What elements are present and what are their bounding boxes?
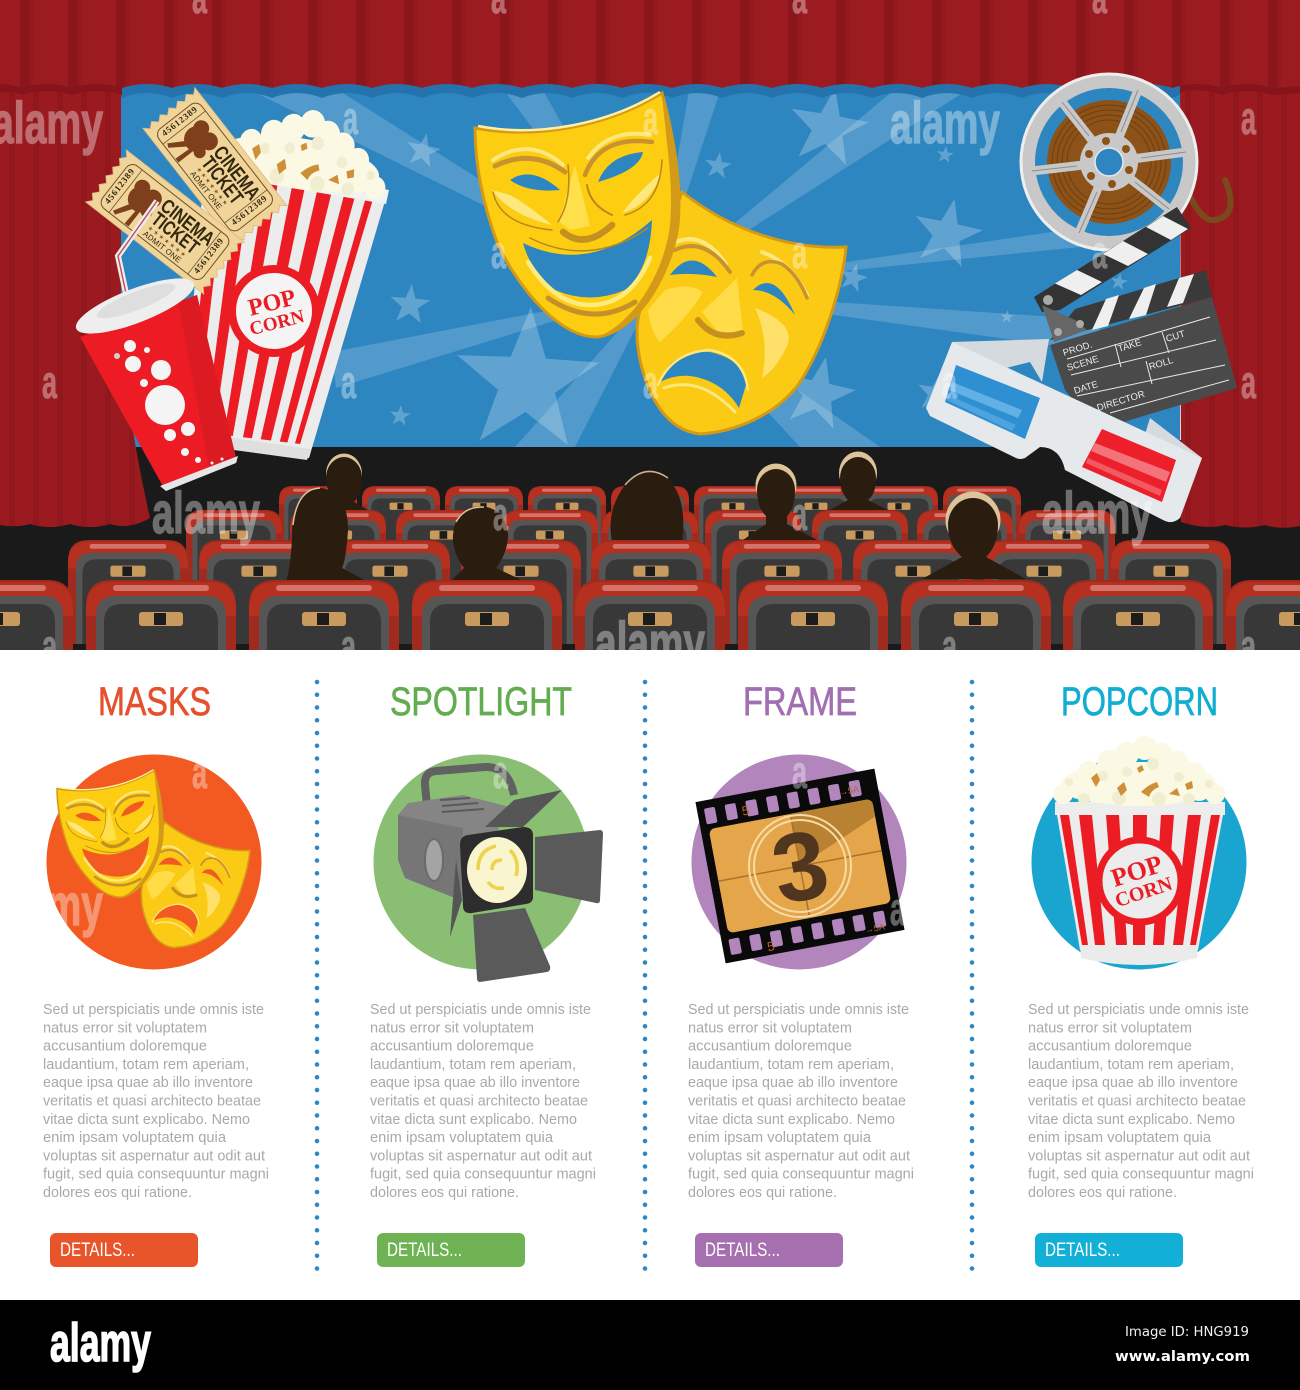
watermarks: a	[491, 226, 506, 278]
text block: popcorn	[1028, 1002, 1254, 1201]
cinema ticket (front): CINEMA	[156, 195, 218, 251]
film clapperboard: SCENE	[1066, 354, 1100, 374]
icon: film frame on purple circle: →5A	[838, 784, 860, 797]
watermarks: a	[942, 356, 957, 408]
text block: spotlight: voluptas sit aspernatur aut odit aut	[370, 1148, 592, 1164]
front row viewers	[286, 488, 1026, 582]
text block: frame: natus error sit voluptatem	[688, 1020, 852, 1036]
3D glasses	[926, 342, 1202, 522]
icon: film frame on purple circle: →5A	[864, 922, 886, 935]
left side curtain	[0, 85, 150, 527]
cinema ticket (front): TICKET	[147, 208, 203, 259]
icon: masks on orange circle	[46, 754, 262, 970]
text block: masks: natus error sit voluptatem	[43, 1020, 207, 1036]
watermarks: a	[42, 620, 57, 672]
film clapperboard: DATE	[1073, 379, 1099, 397]
text block: frame: fugit, sed quia consequuntur magni	[688, 1167, 914, 1183]
website: www.alamy.com	[1115, 1349, 1250, 1365]
text block: masks: veritatis et quasi architecto beatae	[43, 1094, 261, 1110]
top valance curtain	[0, 0, 1300, 88]
soda cup with straw	[70, 201, 238, 491]
film tail	[1170, 180, 1231, 220]
cinema ticket (back): CINEMA	[209, 142, 264, 204]
button: popcorn details: DETAILS...	[1045, 1240, 1120, 1261]
text block: spotlight: natus error sit voluptatem	[370, 1020, 534, 1036]
text block: frame: accusantium doloremque	[688, 1039, 852, 1055]
text block: masks: accusantium doloremque	[43, 1039, 207, 1055]
film clapperboard: ROLL	[1148, 355, 1175, 373]
watermarks: alamy	[152, 481, 260, 546]
text block: spotlight: laudantium, totam rem aperiam,	[370, 1057, 576, 1073]
text block: popcorn: enim ipsam voluptatem quia	[1028, 1130, 1212, 1146]
cinema ticket (front): ADMIT ONE	[141, 229, 183, 265]
heading: masks: MASKS	[98, 680, 211, 724]
button: popcorn details	[1035, 1233, 1183, 1267]
watermarks: a	[643, 356, 658, 408]
panel: spotlight	[370, 680, 603, 1267]
icon: popcorn bucket on blue circle: CORN	[1112, 873, 1176, 912]
film clapperboard: TAKE	[1117, 337, 1143, 355]
text block: frame: Sed ut perspiciatis unde omnis iste	[688, 1002, 909, 1018]
heading: spotlight: SPOTLIGHT	[390, 680, 572, 724]
text block: popcorn: laudantium, totam rem aperiam,	[1028, 1057, 1234, 1073]
popcorn bucket	[182, 95, 396, 460]
watermarks: a	[1241, 620, 1256, 672]
film reel	[1021, 74, 1197, 250]
text block: spotlight: veritatis et quasi architecto beatae	[370, 1094, 588, 1110]
third seat row	[186, 510, 1115, 593]
text block: popcorn: natus error sit voluptatem	[1028, 1020, 1192, 1036]
cinema ticket (back)	[143, 88, 287, 246]
watermarks	[0, 0, 1256, 938]
text block: spotlight: vitae dicta sunt explicabo. Nemo	[370, 1112, 577, 1128]
3D glasses arms	[952, 339, 1202, 510]
watermarks: a	[792, 226, 807, 278]
cinema ticket (back): ★★★★★★★	[195, 166, 230, 208]
text block: masks	[43, 1002, 269, 1201]
watermarks: a	[643, 92, 658, 144]
text block: masks: eaque ipsa quae ab illo inventore	[43, 1075, 253, 1091]
text block: popcorn: accusantium doloremque	[1028, 1039, 1192, 1055]
watermarks: a	[1092, 226, 1107, 278]
text block: masks: laudantium, totam rem aperiam,	[43, 1057, 249, 1073]
watermarks: a	[343, 92, 358, 144]
watermarks: a	[792, 746, 807, 798]
heading: frame: FRAME	[743, 680, 857, 724]
film clapperboard: CUT	[1165, 329, 1187, 345]
button: frame details: DETAILS...	[705, 1240, 780, 1261]
icon: popcorn bucket on blue circle: POP	[1108, 849, 1166, 893]
text block: masks: voluptas sit aspernatur aut odit aut	[43, 1148, 265, 1164]
text block: popcorn: Sed ut perspiciatis unde omnis iste	[1028, 1002, 1249, 1018]
button: spotlight details: DETAILS...	[387, 1240, 462, 1261]
text block: popcorn: voluptas sit aspernatur aut odit aut	[1028, 1148, 1250, 1164]
text block: spotlight: Sed ut perspiciatis unde omnis iste	[370, 1002, 591, 1018]
button: masks details	[50, 1233, 198, 1267]
watermarks: a	[792, 488, 807, 540]
text block: frame: veritatis et quasi architecto beatae	[688, 1094, 906, 1110]
footer logo: alamy	[50, 1313, 151, 1373]
icon: film frame on purple circle	[692, 754, 906, 970]
text block: popcorn: fugit, sed quia consequuntur magni	[1028, 1167, 1254, 1183]
icon: film frame on purple circle: 5	[741, 803, 750, 819]
button: masks details: DETAILS...	[60, 1240, 135, 1261]
text block: frame: vitae dicta sunt explicabo. Nemo	[688, 1112, 895, 1128]
cinema ticket (front): 45612389	[191, 236, 226, 275]
dark auditorium floor	[0, 440, 1300, 655]
watermarks: alamy	[1042, 481, 1152, 546]
cinema ticket (back): 45612389	[229, 193, 269, 227]
text block: frame	[688, 1002, 914, 1201]
panel: masks	[43, 680, 269, 1267]
film clapperboard	[1034, 207, 1237, 423]
column divider 1	[315, 682, 319, 1274]
text block: frame: laudantium, totam rem aperiam,	[688, 1057, 894, 1073]
middle row viewers	[611, 464, 821, 542]
text block: masks: dolores eos qui ratione.	[43, 1185, 192, 1201]
button: spotlight details	[377, 1233, 525, 1267]
cinema ticket (back): 45612389	[160, 104, 199, 138]
white content panel	[0, 650, 1300, 1300]
text block: masks: vitae dicta sunt explicabo. Nemo	[43, 1112, 250, 1128]
text block: popcorn: dolores eos qui ratione.	[1028, 1185, 1177, 1201]
text block: masks: fugit, sed quia consequuntur magni	[43, 1167, 269, 1183]
icon: film frame on purple circle: 5	[766, 938, 776, 954]
footer bar	[0, 1300, 1300, 1390]
back row viewers	[326, 452, 892, 512]
text block: popcorn: vitae dicta sunt explicabo. Nemo	[1028, 1112, 1235, 1128]
text block: frame: voluptas sit aspernatur aut odit aut	[688, 1148, 910, 1164]
text block: spotlight: dolores eos qui ratione.	[370, 1185, 519, 1201]
back seat row	[279, 486, 1021, 554]
watermarks: a	[1241, 92, 1256, 144]
second seat row	[68, 540, 1231, 644]
heading: popcorn: POPCORN	[1061, 680, 1218, 724]
icon: film frame on purple circle: 3	[764, 808, 837, 925]
watermarks: a	[341, 620, 356, 672]
text block: masks: Sed ut perspiciatis unde omnis iste	[43, 1002, 264, 1018]
popcorn bucket: POP	[246, 285, 298, 322]
icon: popcorn bucket on blue circle	[1032, 736, 1246, 970]
watermarks: a	[192, 746, 207, 798]
text block: spotlight: enim ipsam voluptatem quia	[370, 1130, 554, 1146]
cinema ticket (back): TICKET	[197, 153, 247, 209]
curtain shadow scallops	[0, 80, 1300, 95]
text block: frame: enim ipsam voluptatem quia	[688, 1130, 872, 1146]
button: frame details	[695, 1233, 843, 1267]
watermarks: a	[942, 620, 957, 672]
watermarks: a	[1241, 356, 1256, 408]
watermarks: a	[42, 356, 57, 408]
cinema screen with rays and stars	[121, 80, 1180, 447]
column divider 2	[643, 682, 647, 1274]
watermarks: a	[493, 488, 508, 540]
popcorn bucket: CORN	[247, 306, 307, 340]
cinema ticket (front): ★★★★★★★	[146, 225, 188, 260]
text block: spotlight: accusantium doloremque	[370, 1039, 534, 1055]
watermarks: alamy	[890, 91, 1000, 156]
panel: frame	[688, 680, 914, 1267]
text block: frame: eaque ipsa quae ab illo inventore	[688, 1075, 898, 1091]
image id: Image ID: HNG919	[1125, 1324, 1249, 1340]
film clapperboard: DIRECTOR	[1096, 389, 1146, 414]
text block: spotlight: fugit, sed quia consequuntur magni	[370, 1167, 596, 1183]
column divider 3	[970, 682, 974, 1274]
watermarks: alamy	[595, 611, 705, 676]
front seat row	[0, 580, 1300, 710]
cinema ticket (front)	[86, 150, 244, 294]
text block: popcorn: eaque ipsa quae ab illo inventore	[1028, 1075, 1238, 1091]
text block: popcorn: veritatis et quasi architecto beatae	[1028, 1094, 1246, 1110]
text block: spotlight	[370, 1002, 596, 1201]
cinema ticket (front): 45612389	[102, 166, 136, 206]
film clapperboard: PROD.	[1062, 340, 1094, 359]
right side curtain	[1180, 85, 1300, 528]
text block: frame: dolores eos qui ratione.	[688, 1185, 837, 1201]
hero: theatre scene	[0, 0, 1300, 710]
theatre masks	[475, 92, 846, 434]
watermarks: a	[493, 746, 508, 798]
text block: masks: enim ipsam voluptatem quia	[43, 1130, 227, 1146]
watermarks: a	[341, 356, 356, 408]
icon: spotlight on green circle	[374, 754, 603, 982]
watermarks: a	[890, 883, 905, 935]
panel: popcorn	[1028, 680, 1254, 1267]
text block: spotlight: eaque ipsa quae ab illo inventore	[370, 1075, 580, 1091]
cinema ticket (back): ADMIT ONE	[188, 170, 224, 211]
